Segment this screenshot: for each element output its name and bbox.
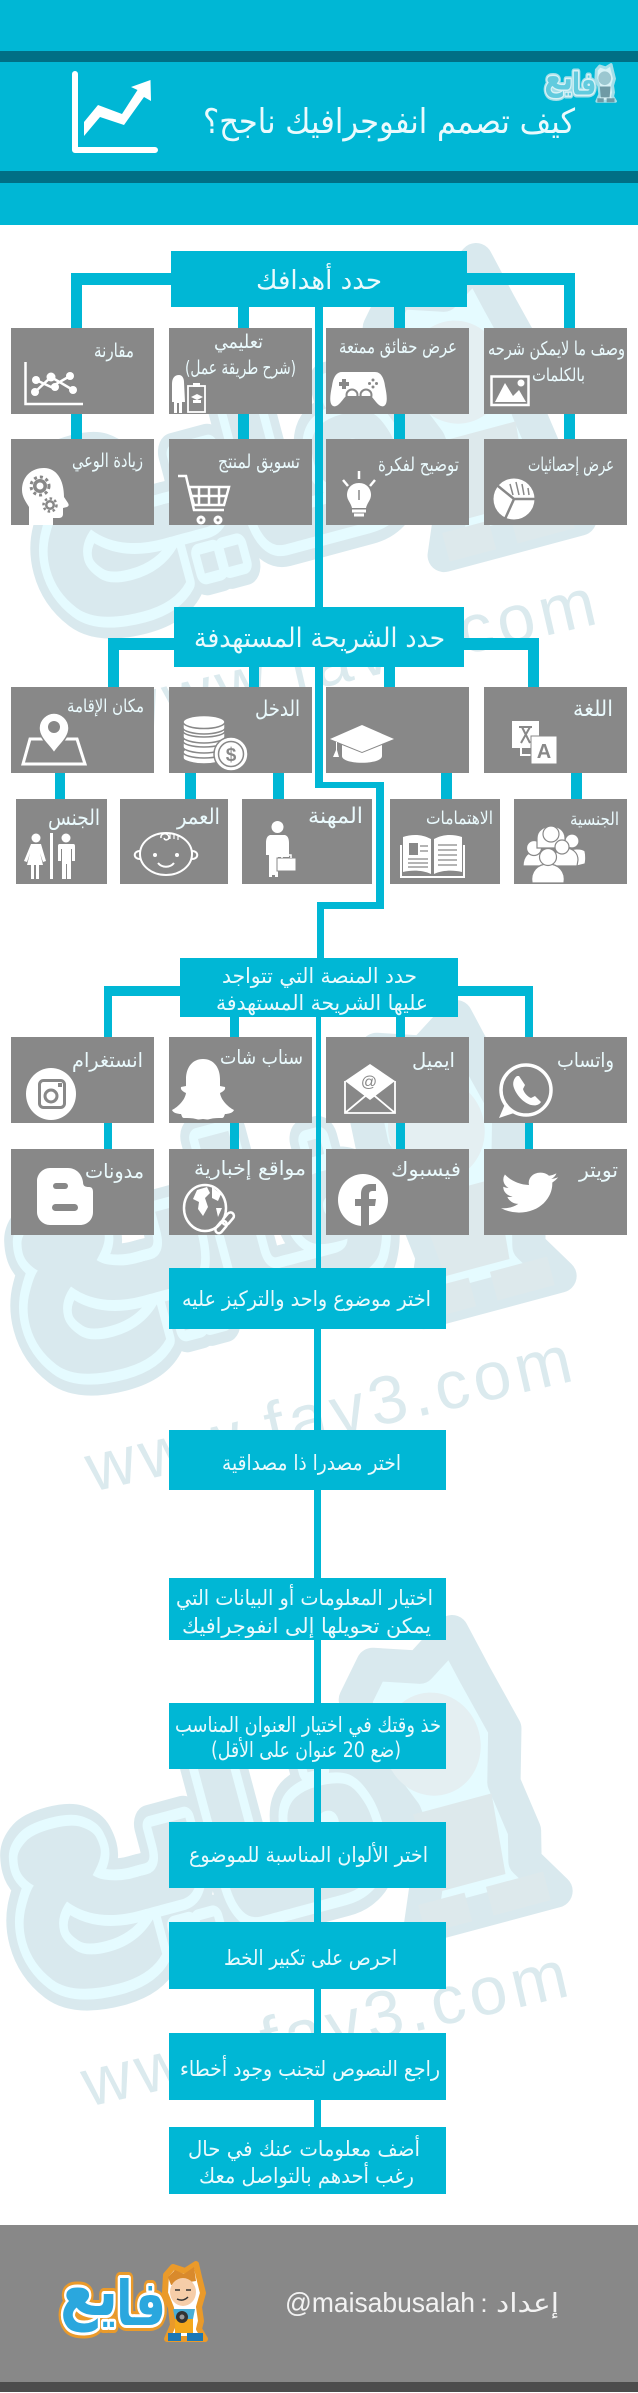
step: take time on title: خذ وقتك في اختيار العنوان المناسب (175, 1713, 441, 1737)
flow line: steps connector (314, 1329, 321, 2133)
card: snapchat: سناب شات (220, 1045, 303, 1069)
fav3 logo colour: يع (60, 2248, 118, 2333)
heading box: choose platform: عليها الشريحة المستهدفة (216, 991, 428, 1015)
card: raise awareness: زيادة الوعي (72, 450, 143, 472)
icon: blogger (37, 1168, 93, 1225)
watermark: fav3 logo bottom: فا (170, 1674, 417, 1979)
fav3 logo colour: يع (60, 2248, 118, 2333)
credit text: إعداد (496, 2289, 559, 2319)
fav3 logo colour: فا (116, 2267, 166, 2340)
card: age (120, 799, 228, 884)
connectors: goals tree (71, 273, 575, 607)
step: choose one topic: اختر موضوع واحد والتركيز عليه (182, 1287, 431, 1311)
icon: shopping cart (178, 476, 229, 524)
card: age: العمر (176, 805, 220, 830)
step: take time on title: (ضع 20 عنوان على الأقل) (211, 1737, 401, 1762)
watermark: fav3 logo top (0, 195, 582, 665)
card: language (484, 687, 627, 773)
card: nationality: الجنسية (570, 809, 619, 830)
card: facebook: فيسبوك (391, 1157, 461, 1181)
icon: pie chart (494, 478, 535, 520)
watermark: fav3 url top: www.fav3.com (101, 564, 603, 750)
connectors: audience tree (55, 525, 582, 958)
step: enlarge font: احرص على تكبير الخط (224, 1946, 397, 1970)
small fav3 logo (544, 57, 615, 102)
card: place of residence: مكان الإقامة (67, 696, 144, 717)
watermark: fav3 logo bottom: فا (170, 1674, 417, 1979)
small fav3 logo: يع (544, 57, 573, 98)
watermark: fav3 logo middle (0, 952, 562, 1422)
card: raise awareness (11, 439, 154, 525)
card: describe the indescribable (484, 328, 627, 414)
icon: envelope: @ (361, 1074, 377, 1091)
heading box: set target audience: حدد الشريحة المستهدفة (194, 623, 445, 654)
card: whatsapp (484, 1037, 627, 1123)
card: comparison (11, 328, 154, 414)
card: product marketing (169, 439, 312, 525)
icon: picture frame (492, 376, 528, 405)
card: profession (242, 799, 372, 884)
icon: map pin (23, 713, 85, 764)
watermark: fav3 logo middle: فا (174, 1059, 421, 1364)
card: blogs (11, 1149, 154, 1235)
icon: coins: $ (226, 745, 237, 766)
card: income: الدخل (255, 697, 300, 722)
step: choose one topic (169, 1268, 446, 1329)
card: gender: الجنس (48, 806, 100, 831)
icon: translate: A (537, 741, 551, 763)
fav3 logo colour: يع (60, 2248, 118, 2333)
icon: graduation cap (330, 725, 394, 763)
step: proofread: راجع النصوص لتجنب وجود أخطاء (180, 2055, 440, 2081)
small fav3 logo: فا (572, 67, 596, 102)
header banner (0, 0, 638, 225)
card: nationality (514, 799, 627, 884)
step: choose data: يمكن تحويلها إلى انفوجرافيك (182, 1614, 431, 1639)
icon: game controller (330, 372, 387, 406)
watermark: fav3 logo bottom: فا (170, 1674, 417, 1979)
step: add contact information: رغب أحدهم بالتواصل معك (199, 2162, 414, 2189)
watermark: fav3 logo bottom (0, 1567, 558, 2037)
icon: comparison chart (26, 362, 83, 404)
card: snapchat (169, 1037, 312, 1123)
icon: envelope (345, 1064, 395, 1113)
small fav3 logo: فا (572, 67, 596, 102)
card: twitter: تويتر (578, 1158, 618, 1182)
card: instagram: انستغرام (72, 1048, 143, 1072)
card: educational (169, 328, 312, 414)
card: clarify an idea (326, 439, 469, 525)
icon: globe with chain (184, 1185, 235, 1235)
card: comparison: مقارنة (94, 340, 134, 362)
icon: growth chart (75, 74, 155, 150)
watermark: fav3 url middle: www.fav3.com (77, 1321, 579, 1507)
small fav3 logo: يع (544, 57, 573, 98)
card: educational: تعليمي (214, 331, 263, 353)
card: place of residence (11, 687, 154, 773)
title: كيف تصمم انفوجرافيك ناجح؟ (203, 102, 576, 142)
card: describe the indescribable: بالكلمات (532, 365, 585, 386)
watermark: fav3 logo middle: فا (174, 1059, 421, 1364)
step: choose a credible source (169, 1430, 446, 1490)
watermark: fav3 logo top: فا (194, 302, 441, 607)
card: educational: (شرح طريقة عمل) (185, 357, 296, 379)
heading box: set your goals: حدد أهدافك (256, 262, 382, 296)
step: choose colours (169, 1822, 446, 1888)
card: education level (326, 687, 469, 773)
card: profession: المهنة (308, 804, 363, 829)
credit text: @maisabusalah (285, 2287, 475, 2318)
card: gender (16, 799, 107, 884)
credit text: : (480, 2288, 488, 2318)
heading box: set your goals (171, 251, 467, 307)
fav3 logo colour: فا (116, 2267, 166, 2340)
card: facebook (326, 1149, 469, 1235)
icon: coins (183, 716, 248, 771)
step: choose colours: اختر الألوان المناسبة للموضوع (189, 1842, 428, 1867)
step: choose a credible source: اختر مصدرا ذا مصداقية (222, 1451, 401, 1475)
connectors: platforms tree (104, 986, 533, 1268)
icon: translate (512, 721, 557, 764)
card: news sites (169, 1149, 312, 1235)
card: whatsapp: واتساب (557, 1048, 614, 1072)
card: income (169, 687, 312, 773)
step: choose data (169, 1578, 446, 1640)
card: news sites: مواقع إخبارية (194, 1156, 306, 1181)
step: add contact information (169, 2127, 446, 2194)
icon: teacher with clipboard (172, 375, 205, 413)
step: proofread (169, 2033, 446, 2100)
card: interests (390, 799, 500, 884)
fav3 logo colour: فا (116, 2267, 166, 2340)
step: choose data: اختيار المعلومات أو البيانات التي (176, 1584, 433, 1610)
card: interests: الاهتمامات (426, 808, 493, 829)
heading box: choose platform: حدد المنصة التي تتواجد (222, 964, 417, 988)
card: clarify an idea: توضيح لفكرة (378, 454, 459, 476)
fav3 logo colour (60, 2248, 205, 2341)
icon: light bulb (343, 471, 375, 516)
card: product marketing: تسويق لمنتج (218, 451, 300, 473)
card: fun facts: عرض حقائق ممتعة (339, 336, 457, 358)
icon: restroom figures (24, 833, 75, 879)
step: add contact information: أضف معلومات عنك في حال (188, 2135, 420, 2161)
watermark: fav3 logo middle: فا (174, 1059, 421, 1364)
card: blogs: مدونات (85, 1159, 144, 1183)
icon: snapchat ghost (172, 1059, 234, 1119)
icon: businessman with briefcase (266, 821, 296, 877)
heading box: set target audience (174, 607, 464, 667)
heading box: choose platform (180, 958, 458, 1017)
small fav3 logo: فا (572, 67, 596, 102)
step: take time on title (169, 1703, 446, 1769)
icon: instagram (26, 1068, 76, 1120)
watermark: fav3 logo top: فا (194, 302, 441, 607)
footer (0, 2225, 638, 2392)
card: fun facts (326, 328, 469, 414)
step: enlarge font (169, 1922, 446, 1989)
card: twitter (484, 1149, 627, 1235)
icon: facebook (338, 1174, 388, 1226)
icon: group of people (523, 826, 586, 883)
card: email (326, 1037, 469, 1123)
card: language: اللغة (573, 697, 613, 722)
card: email: ايميل (412, 1048, 455, 1072)
card: statistics (484, 439, 627, 525)
icon: baby face (135, 833, 197, 875)
icon: head with gears (22, 468, 69, 525)
icon: open book (401, 835, 464, 877)
watermark: fav3 url bottom: www.fav3.com (73, 1936, 575, 2122)
watermark: fav3 logo top: فا (194, 302, 441, 607)
icon: whatsapp (499, 1065, 551, 1118)
small fav3 logo: يع (544, 57, 573, 98)
card: instagram (11, 1037, 154, 1123)
icon: twitter bird (501, 1173, 558, 1213)
